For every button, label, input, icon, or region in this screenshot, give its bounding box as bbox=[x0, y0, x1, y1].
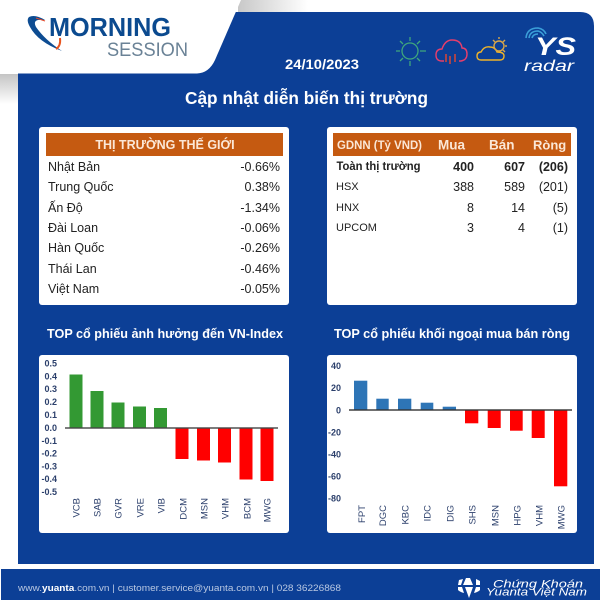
foreign trading header: Bán bbox=[489, 138, 515, 152]
x axis labels: VHM bbox=[534, 505, 546, 526]
heading: VN-Index chart: TOP cổ phiếu ảnh hưởng đến VN-Index bbox=[47, 326, 284, 341]
x axis labels: HPG bbox=[512, 505, 524, 526]
heading: foreign net chart: TOP cổ phiếu khối ngoại mua bán ròng bbox=[334, 326, 570, 341]
foreign trading rows: 607 bbox=[504, 160, 525, 174]
negative bars bbox=[465, 410, 567, 486]
foreign trading rows: HNX bbox=[336, 202, 360, 214]
x axis labels: GVR bbox=[114, 498, 124, 519]
world markets rows: -0.46% bbox=[240, 262, 280, 276]
x axis labels: VCB bbox=[72, 498, 82, 518]
foreign trading rows: UPCOM bbox=[336, 222, 377, 234]
foreign trading rows: 4 bbox=[518, 221, 525, 235]
y axis labels: -0.1 bbox=[41, 436, 57, 446]
title: Cập nhật diễn biến thị trường bbox=[185, 87, 428, 108]
y axis labels: 0.4 bbox=[44, 372, 57, 382]
y axis labels: 0.2 bbox=[44, 397, 57, 407]
foreign trading rows: 400 bbox=[453, 160, 474, 174]
foreign trading rows: 3 bbox=[467, 221, 474, 235]
y axis labels: -20 bbox=[328, 428, 341, 438]
icon: Yuanta logo bbox=[458, 578, 480, 598]
logo: YS radar: YS bbox=[535, 33, 576, 61]
x axis labels: VIB bbox=[156, 498, 168, 513]
x axis labels: DCM bbox=[178, 498, 190, 520]
footer brand text: Chứng Khoán bbox=[493, 578, 583, 590]
foreign trading rows bbox=[336, 160, 568, 235]
x axis labels: KBC bbox=[400, 505, 412, 525]
x axis labels bbox=[357, 505, 568, 529]
foreign trading rows: Toàn thị trường bbox=[336, 161, 420, 173]
world markets rows: Đài Loan bbox=[48, 221, 98, 235]
positive bars bbox=[354, 381, 456, 410]
world markets rows: Nhật Bản bbox=[48, 160, 100, 174]
x axis labels: SHS bbox=[468, 505, 478, 525]
panel: foreign trading bbox=[327, 127, 577, 305]
x axis labels: DGC bbox=[378, 505, 389, 526]
world markets header bbox=[46, 133, 283, 156]
icon: rain cloud bbox=[436, 40, 467, 64]
header logo tab bbox=[0, 0, 241, 74]
foreign trading header: GDNN (Tỷ VND) bbox=[337, 140, 422, 152]
x axis labels bbox=[72, 498, 274, 522]
world markets rows: 0.38% bbox=[245, 180, 280, 194]
y axis labels: 40 bbox=[331, 361, 341, 371]
foreign trading rows: 8 bbox=[467, 201, 474, 215]
logo text: session: SESSION bbox=[107, 39, 188, 61]
x axis labels: VRE bbox=[136, 498, 146, 518]
icon: partly cloudy bbox=[477, 37, 507, 60]
world markets rows: Trung Quốc bbox=[48, 180, 114, 194]
footer brand text bbox=[486, 578, 587, 598]
x axis labels: VHM bbox=[220, 498, 232, 519]
x axis labels: MWG bbox=[262, 498, 274, 522]
y axis labels: 20 bbox=[331, 383, 341, 393]
foreign trading header: Mua bbox=[438, 138, 465, 152]
world markets rows: -0.26% bbox=[240, 241, 280, 255]
foreign trading rows: 589 bbox=[504, 180, 525, 194]
y axis labels: -0.4 bbox=[41, 474, 57, 484]
foreign trading header: Ròng bbox=[533, 138, 566, 152]
y axis labels: 0.3 bbox=[44, 384, 57, 394]
panel: VN-Index bar chart bbox=[39, 355, 289, 533]
world markets rows: -1.34% bbox=[240, 201, 280, 215]
world markets header: THỊ TRƯỜNG THẾ GIỚI bbox=[95, 137, 235, 152]
world markets rows: Việt Nam bbox=[48, 282, 99, 296]
y axis labels: -80 bbox=[328, 494, 341, 504]
world markets rows bbox=[48, 160, 280, 296]
y axis labels: 0.0 bbox=[44, 423, 57, 433]
foreign trading rows: (1) bbox=[553, 221, 568, 235]
footer bar bbox=[1, 569, 600, 600]
positive bars bbox=[70, 374, 167, 428]
x axis labels: MWG bbox=[556, 505, 568, 529]
foreign trading rows: HSX bbox=[336, 181, 359, 193]
world markets rows: -0.05% bbox=[240, 282, 280, 296]
foreign trading header bbox=[333, 133, 571, 156]
y axis labels bbox=[328, 361, 341, 504]
y axis labels: -0.5 bbox=[41, 487, 57, 497]
panel: foreign net bar chart bbox=[327, 355, 577, 533]
y axis labels: -0.2 bbox=[41, 448, 57, 458]
world markets rows: Ấn Độ bbox=[48, 200, 83, 215]
x axis labels: MSN bbox=[490, 505, 502, 526]
footer brand text: Yuanta Việt Nam bbox=[486, 586, 587, 598]
x axis labels: MSN bbox=[200, 498, 210, 519]
y axis labels: 0 bbox=[336, 406, 341, 416]
y axis labels: -0.3 bbox=[41, 462, 57, 472]
foreign trading rows: (206) bbox=[539, 160, 568, 174]
y axis labels: 0.5 bbox=[44, 358, 57, 368]
foreign trading rows: 388 bbox=[453, 180, 474, 194]
footer contact text: www.yuanta.com.vn | customer.service@yuanta.com.vn | 028 36226868 bbox=[17, 583, 341, 594]
negative bars bbox=[176, 428, 274, 481]
logo: YS radar bbox=[524, 28, 576, 75]
logo text: morning: MORNING bbox=[49, 12, 171, 42]
world markets rows: Thái Lan bbox=[48, 262, 97, 276]
y axis labels: -40 bbox=[328, 450, 341, 460]
y axis labels bbox=[41, 358, 57, 497]
icon: sun bbox=[396, 37, 426, 66]
world markets rows: -0.06% bbox=[240, 221, 280, 235]
x axis labels: BCM bbox=[242, 498, 254, 519]
x axis labels: FPT bbox=[357, 505, 368, 523]
x axis labels: IDC bbox=[422, 505, 434, 521]
y axis labels: -60 bbox=[328, 472, 341, 482]
panel: world markets bbox=[39, 127, 289, 305]
foreign trading rows: (5) bbox=[553, 201, 568, 215]
foreign trading rows: 14 bbox=[511, 201, 525, 215]
icon: morning session swoosh bbox=[28, 16, 62, 51]
logo: YS radar: radar bbox=[524, 58, 575, 75]
foreign trading rows: (201) bbox=[539, 180, 568, 194]
x axis labels: SAB bbox=[92, 498, 104, 517]
y axis labels: 0.1 bbox=[44, 410, 57, 420]
world markets rows: -0.66% bbox=[240, 160, 280, 174]
world markets rows: Hàn Quốc bbox=[48, 241, 104, 255]
date: 24/10/2023 bbox=[285, 57, 360, 72]
x axis labels: DIG bbox=[446, 505, 456, 522]
